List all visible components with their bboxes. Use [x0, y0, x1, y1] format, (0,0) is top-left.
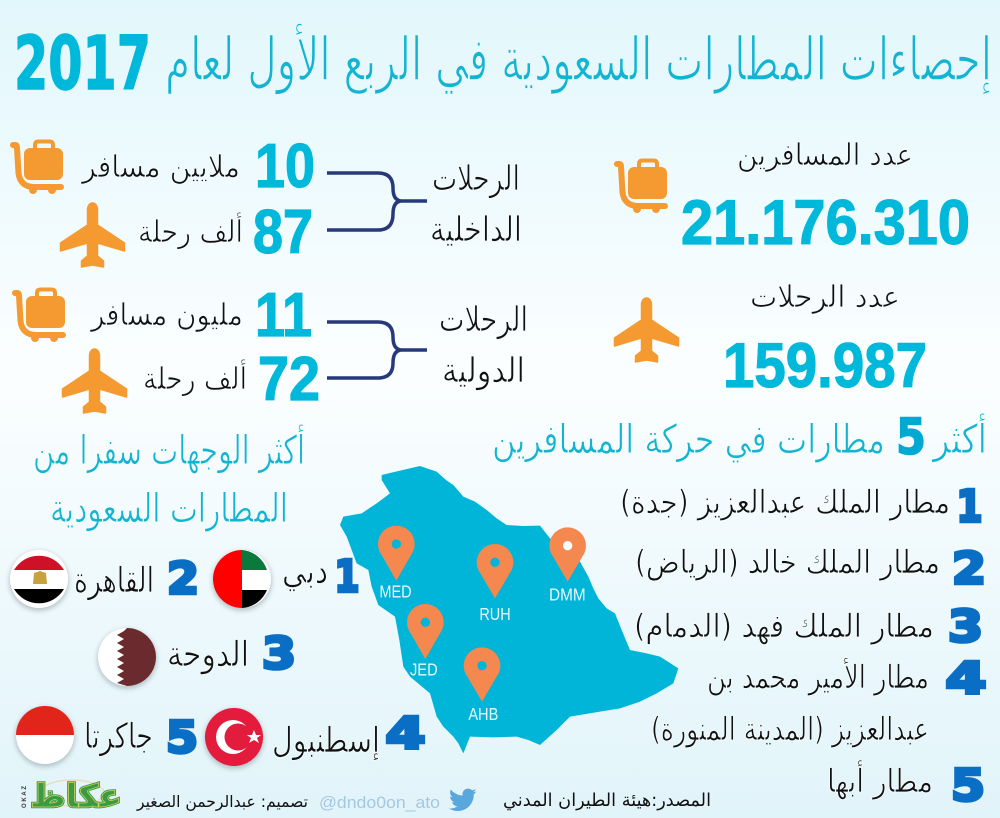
- pin: AHB: [464, 647, 500, 724]
- text: domestic passengers: ملايين مسافر: [80, 150, 240, 185]
- footer: [22, 777, 711, 815]
- label: passengers: عدد المسافرين: [737, 138, 913, 173]
- pin: DMM: [549, 527, 586, 605]
- airport 2: 2: [952, 544, 986, 594]
- airport 4: 4: [946, 654, 986, 704]
- destination 5: Jakarta: 5: [166, 712, 198, 764]
- heading: top 5 airports: أكثر: [931, 413, 987, 463]
- airport 5: [827, 760, 985, 812]
- destination 3: Doha: [97, 628, 296, 689]
- map of Saudi Arabia: [340, 466, 678, 753]
- bracket: domestic: [327, 173, 427, 230]
- flag: Qatar: [98, 628, 156, 686]
- number: passengers: 21.176.310: [681, 188, 970, 258]
- panel: international flights: [15, 281, 528, 414]
- airport 4: [651, 654, 986, 748]
- destination 1: Dubai: 1: [334, 552, 360, 602]
- text: international passengers: مليون مسافر: [89, 298, 243, 333]
- pin: RUH: [477, 544, 513, 624]
- number: 87: 87: [253, 198, 313, 267]
- pin: AHB: AHB: [468, 704, 498, 724]
- pin: RUH: RUH: [479, 604, 511, 624]
- heading: top destinations: المطارات السعودية: [50, 486, 288, 532]
- airport 5: 5: [951, 760, 985, 812]
- logo: عكاظ: [30, 777, 122, 815]
- icon: suitcase international: [15, 290, 65, 342]
- text: international flights: ألف رحلة: [143, 358, 247, 397]
- airport 1: 1: [956, 482, 982, 532]
- text: domestic flights: ألف رحلة: [138, 211, 243, 250]
- logo: عكاظ: [30, 777, 122, 815]
- panel: domestic flights: [13, 132, 522, 267]
- airport 4: عبدالعزيز (المدينة المنورة): [651, 710, 929, 748]
- destination 1: Dubai: دبي: [282, 552, 328, 592]
- airport 1: مطار الملك عبدالعزيز (جدة): [620, 483, 950, 521]
- title year: 2017: [14, 21, 151, 107]
- icon: suitcase domestic: [13, 142, 63, 194]
- destination 1: Dubai: [212, 550, 360, 611]
- label: domestic line 2: الداخلية: [430, 210, 522, 250]
- designer credit: تصميم: عبدالرحمن الصغير: [136, 792, 308, 812]
- panel: top destinations: [9, 424, 426, 769]
- heading: top destinations: [33, 424, 305, 532]
- airport 3: 3: [948, 602, 983, 652]
- icon: suitcase: [617, 160, 667, 213]
- destination 2: Cairo: 2: [167, 554, 199, 604]
- heading: top 5 airports: مطارات في حركة المسافرين: [492, 417, 885, 463]
- panel: top 5 airports: [492, 408, 987, 812]
- pin: JED: [407, 604, 444, 680]
- destination 3: Doha: 3: [262, 628, 296, 680]
- destination 2: Cairo: [9, 550, 199, 611]
- flag: Egypt: [10, 550, 68, 608]
- icon: plane domestic: [60, 203, 124, 267]
- heading: top 5 airports: 5: [896, 408, 926, 466]
- flag: UAE: [213, 550, 271, 608]
- airport 3: [634, 602, 983, 652]
- destination 4: Istanbul: 4: [386, 708, 426, 760]
- pin: MED: [378, 526, 415, 601]
- flag: Turkey: [205, 708, 263, 766]
- pin: MED: MED: [379, 581, 412, 601]
- label: flights: عدد الرحلات: [750, 280, 900, 315]
- source credit: المصدر:هيئة الطيران المدني: [503, 790, 711, 811]
- pin: DMM: DMM: [549, 585, 586, 605]
- heading: top destinations: أكثر الوجهات سفرا من: [33, 424, 305, 474]
- panel: total flights: [614, 280, 927, 401]
- label: international: الرحلات: [439, 300, 528, 340]
- flag: Indonesia: [16, 706, 74, 764]
- pin: JED: JED: [410, 660, 438, 680]
- number: 10: 10: [255, 132, 315, 201]
- destination 5: Jakarta: جاكرتا: [84, 717, 153, 757]
- icon: plane international: [62, 349, 126, 413]
- label: domestic: الرحلات: [432, 159, 520, 199]
- destination 5: Jakarta: [15, 706, 198, 767]
- airport 4: مطار الأمير محمد بن: [707, 657, 929, 696]
- panel: total passengers: [617, 138, 970, 258]
- destination 2: Cairo: القاهرة: [74, 561, 154, 601]
- airport 2: مطار الملك خالد (الرياض): [635, 543, 940, 581]
- destination 3: Doha: الدوحة: [167, 635, 249, 675]
- airport 3: مطار الملك فهد (الدمام): [634, 607, 934, 645]
- title: [14, 21, 992, 107]
- destination 4: Istanbul: [204, 708, 426, 769]
- destination 4: Istanbul: إسطنبول: [272, 721, 380, 761]
- number: flights: 159.987: [723, 331, 927, 401]
- number: 72: 72: [258, 345, 320, 414]
- map shape: [340, 466, 678, 753]
- twitter handle: @dndo0on_ato: [319, 793, 440, 812]
- airport 5: مطار أبها: [827, 760, 933, 800]
- logo: OKAZ: [22, 786, 28, 808]
- bracket: international: [327, 322, 427, 378]
- label: international line 2: الدولية: [442, 351, 525, 391]
- icon: plane: [614, 298, 678, 362]
- number: 11: 11: [255, 281, 312, 350]
- icon: twitter bird: [449, 789, 477, 811]
